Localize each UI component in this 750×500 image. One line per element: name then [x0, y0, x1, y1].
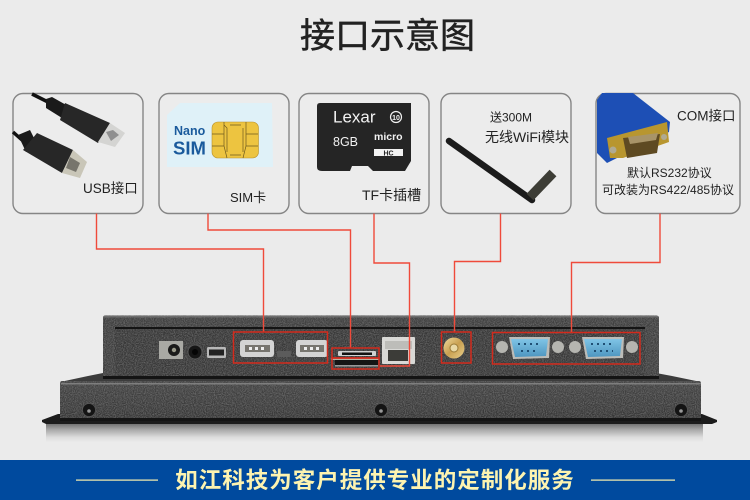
port: power jack: [159, 341, 183, 359]
panel: WiFi: [441, 94, 571, 214]
icon: Lexar micro SD card: 10: [392, 115, 400, 122]
connector lines: [96, 214, 660, 366]
port: RJ45: [382, 337, 415, 364]
icon: nano SIM card: [167, 103, 273, 167]
panel: TF card: [299, 94, 429, 214]
port: COM left: [496, 337, 564, 359]
title: 接口示意图: [300, 17, 475, 56]
device upper body: [103, 316, 659, 379]
device shadow: [46, 423, 703, 442]
port: SIM and TF slots: [331, 351, 379, 366]
port: USB A left: [240, 340, 274, 357]
screws: [82, 404, 688, 416]
line: SIM: [208, 214, 350, 348]
port: USB A right: [296, 340, 328, 357]
device shoulders: [60, 373, 701, 382]
icon: Lexar micro SD card: 8GB: [333, 135, 358, 149]
label: 默认RS232协议: 默认RS232协议: [627, 165, 712, 180]
device base plate: [42, 414, 717, 424]
label: SIM卡: SIM卡: [230, 190, 266, 205]
icon: nano SIM card: SIM: [173, 138, 206, 158]
footer band: [0, 460, 750, 500]
device: industrial panel rear view: [42, 316, 717, 442]
label: TF卡插槽: TF卡插槽: [362, 187, 421, 203]
icon: Lexar micro SD card: HC: [383, 150, 394, 158]
icon: antenna: [449, 141, 553, 200]
box: SIM slot: [332, 348, 379, 358]
label: 无线WiFi模块: 无线WiFi模块: [485, 129, 569, 145]
icon: nano SIM card: Nano: [174, 124, 206, 138]
icon: USB cables: [13, 94, 125, 178]
panel: COM: [596, 93, 740, 214]
icon: Lexar micro SD card: Lexar: [333, 108, 376, 126]
line: USB: [96, 214, 264, 332]
label: 送300M: 送300M: [490, 110, 532, 124]
box: TF slot: [332, 358, 379, 369]
label: 可改装为RS422/485协议: 可改装为RS422/485协议: [602, 182, 734, 197]
port: audio jack: [188, 345, 202, 359]
icon: Lexar micro SD card: [317, 103, 411, 171]
port: small button: [277, 351, 291, 357]
box: COM ports: [492, 332, 640, 364]
panel: USB: [13, 94, 143, 214]
icon: serial connector: [597, 93, 670, 163]
port: mini USB: [207, 347, 226, 358]
footer rule left: [76, 480, 158, 481]
device flange: [60, 381, 701, 421]
panel: SIM: [159, 94, 289, 214]
footer rule right: [591, 480, 675, 481]
line: TF: [374, 214, 410, 366]
label: USB接口: USB接口: [83, 180, 138, 196]
line: WiFi: [454, 214, 500, 332]
box: USB ports: [234, 332, 328, 363]
label: COM接口: COM接口: [677, 108, 736, 124]
footer text: 如江科技为客户提供专业的定制化服务: [175, 467, 575, 493]
port: COM right: [569, 337, 638, 359]
icon: Lexar micro SD card: micro: [374, 131, 403, 143]
box: SMA: [442, 332, 471, 363]
highlight boxes: [234, 332, 640, 369]
line: COM: [572, 214, 660, 332]
port: SMA antenna connector: [444, 338, 464, 358]
